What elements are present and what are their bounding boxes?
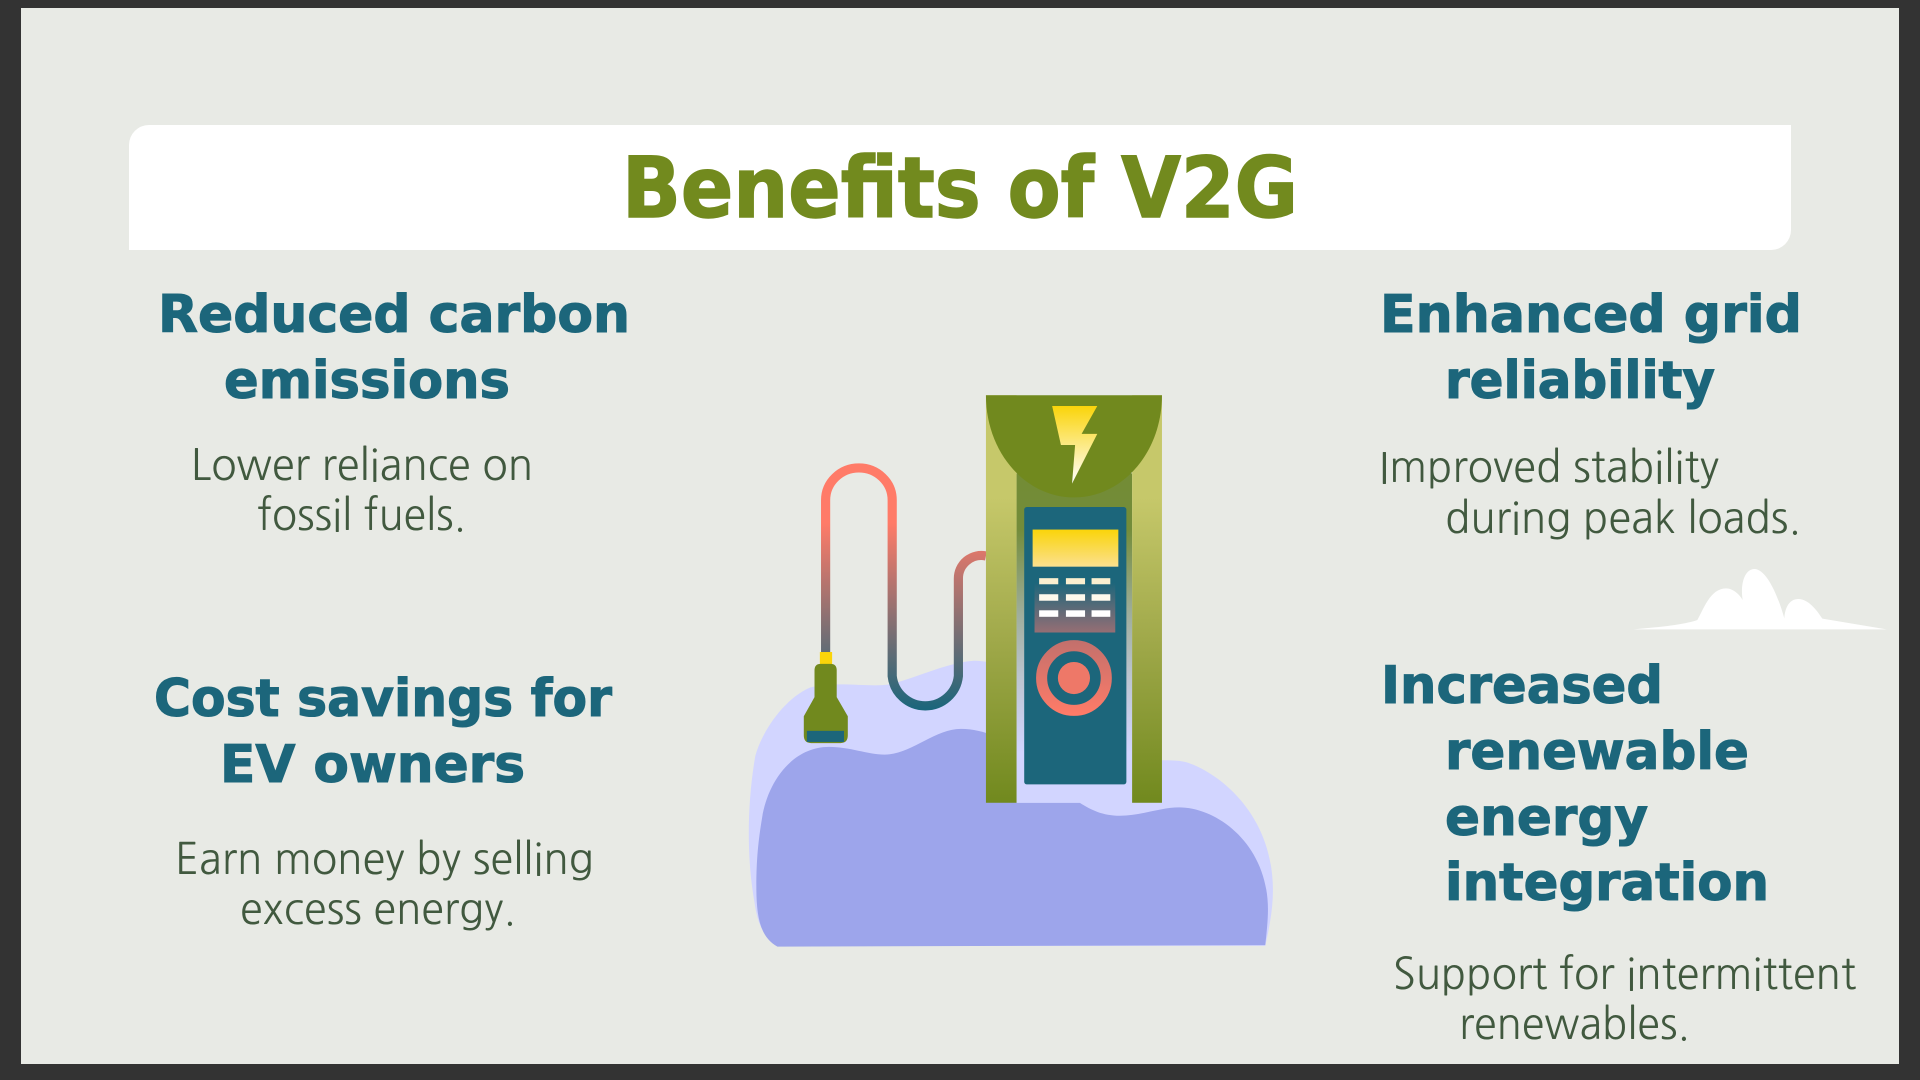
heading: reduced carbon emissions [158,285,630,411]
heading: cost savings for EV owners: Cost savings for [154,669,612,729]
heading: increased renewable energy integration: Increased [1381,656,1663,716]
illustration: EV charging station [749,395,1273,947]
icon: lightning bolt [1052,406,1097,484]
plug [804,652,848,743]
text: support for intermittent renewables [1393,953,1856,1046]
text: support for intermittent renewables: Support for intermittent [1393,953,1856,996]
panel: cost savings [154,669,612,931]
station body [986,395,1162,803]
charging cable [826,468,986,706]
heading: increased renewable energy integration [1381,656,1769,913]
icon: cloud [1633,569,1887,629]
ground blob: light [749,661,1273,946]
display screen [1033,530,1118,567]
text: improved stability [1379,446,1801,540]
text: lower reliance: fossil fuels. [257,494,466,537]
heading: increased renewable energy integration: energy [1445,788,1648,848]
panel: enhanced grid reliability [1379,285,1802,540]
panel: increased renewable energy integration [1381,656,1856,1046]
title banner [129,125,1791,250]
title: Benefits of V2G [622,139,1298,237]
text: earn money: excess energy. [240,888,516,931]
text: lower reliance: Lower reliance on [191,444,533,487]
text: lower reliance [191,444,533,537]
heading: enhanced grid reliability [1380,285,1802,411]
heading: reduced carbon emissions: Reduced carbon [158,285,630,345]
heading: enhanced grid reliability: reliability [1445,351,1715,411]
control panel [1024,507,1126,784]
heading: cost savings for EV owners [154,669,612,795]
heading: cost savings for EV owners: EV owners [220,735,525,795]
keypad [1035,577,1115,632]
heading: enhanced grid reliability: Enhanced grid [1380,285,1802,345]
text: support for intermittent renewables: renewables. [1459,1003,1690,1046]
round button [1042,646,1106,710]
text: improved stability: Improved stability [1379,446,1719,489]
heading: increased renewable energy integration: renewable [1445,722,1749,782]
text: earn money [175,838,594,931]
text: earn money: Earn money by selling [175,838,594,881]
heading: reduced carbon emissions: emissions [224,351,510,411]
heading: increased renewable energy integration: integration [1445,853,1769,913]
panel: reduced carbon emissions [158,285,630,537]
text: improved stability: during peak loads. [1445,497,1801,540]
ground blob: dark [756,729,1268,947]
